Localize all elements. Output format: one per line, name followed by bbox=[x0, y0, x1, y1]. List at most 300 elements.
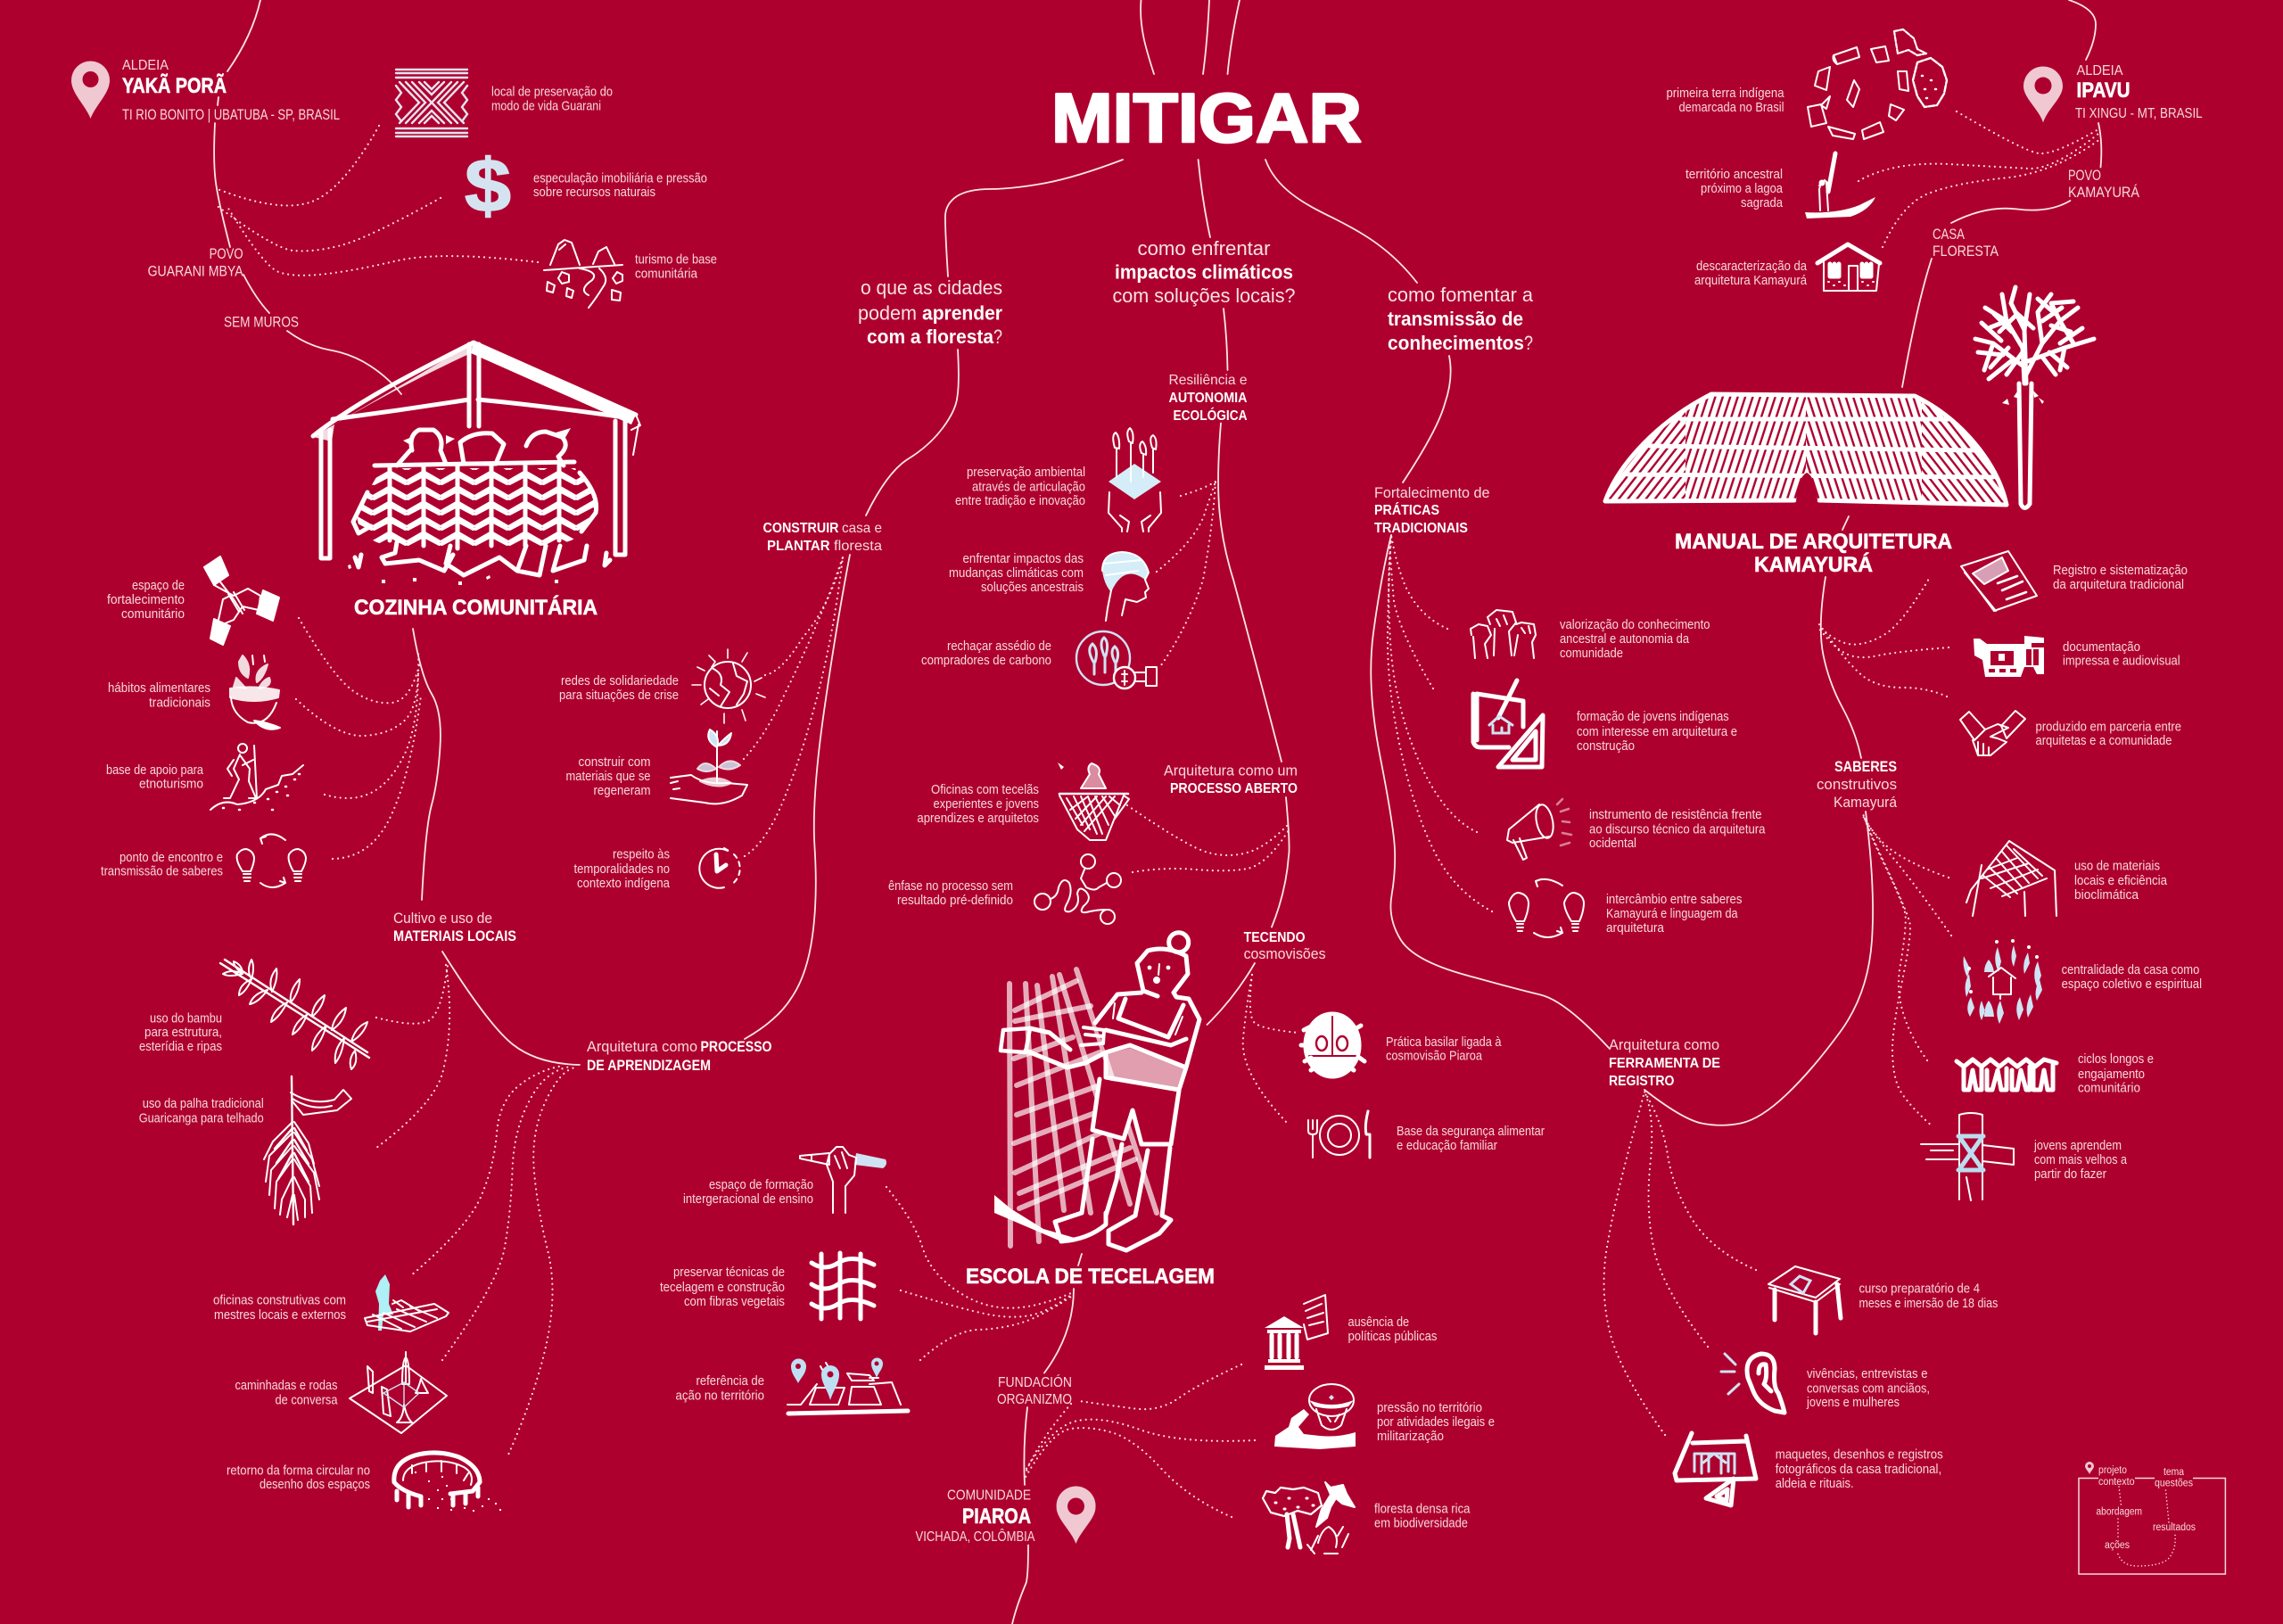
illustration: maloca bbox=[1605, 392, 2011, 508]
text bbox=[1589, 808, 1766, 851]
item: forma circular bbox=[227, 1453, 501, 1512]
location label: YAKÃ PORÃ bbox=[122, 73, 227, 98]
icon: figure in canoe bbox=[1805, 153, 1875, 218]
text: sagrada bbox=[1741, 196, 1784, 210]
text: com fibras vegetais bbox=[684, 1295, 785, 1309]
text: território ancestral bbox=[1685, 168, 1783, 182]
text: comunidade bbox=[1560, 647, 1623, 661]
heading: cosmovisões bbox=[1244, 945, 1326, 962]
label: povo bbox=[2068, 167, 2140, 201]
heading: PROCESSO ABERTO bbox=[1170, 781, 1298, 796]
icon: tree, bird and plant bbox=[1263, 1482, 1355, 1554]
heading: REGISTRO bbox=[1609, 1074, 1675, 1089]
text: Kamayurá e linguagem da bbox=[1606, 907, 1738, 921]
text: produzido em parceria entre bbox=[2035, 721, 2181, 735]
icon: ear bbox=[1721, 1354, 1784, 1413]
question: impactos climáticos bbox=[1113, 237, 1295, 307]
text bbox=[635, 253, 717, 282]
text bbox=[949, 552, 1084, 595]
icon: thatched frame bbox=[1966, 841, 2056, 916]
text bbox=[1377, 1401, 1495, 1444]
text: regeneram bbox=[594, 784, 651, 798]
legend labels: abordagem bbox=[2096, 1507, 2142, 1518]
legend frame bbox=[2079, 1479, 2225, 1574]
text bbox=[491, 86, 613, 114]
legend: map of the diagram bbox=[2079, 1462, 2225, 1574]
item: preservação ambiental bbox=[955, 428, 1161, 532]
text: entre tradição e inovação bbox=[955, 494, 1085, 508]
text: desenho dos espaços bbox=[260, 1478, 370, 1492]
text: meses e imersão de 18 dias bbox=[1859, 1297, 1998, 1311]
text: floresta densa rica bbox=[1374, 1502, 1471, 1516]
text bbox=[676, 1374, 764, 1404]
icon: trees on diamond with hands bbox=[1109, 428, 1161, 532]
location label: ALDEIA bbox=[2076, 63, 2123, 78]
text bbox=[1397, 1125, 1545, 1153]
heading: PLANTAR bbox=[767, 539, 830, 554]
item: vivências bbox=[1721, 1354, 1930, 1413]
item: intercâmbio entre saberes bbox=[1509, 879, 1743, 937]
icon: mask bbox=[1301, 1014, 1364, 1076]
icon: worker on platform bbox=[365, 1274, 449, 1331]
label: povo: KAMAYURÁ bbox=[2068, 184, 2140, 201]
text bbox=[108, 681, 210, 710]
text: Prática basilar ligada à bbox=[1386, 1035, 1502, 1050]
label: povo bbox=[148, 245, 243, 280]
text: etnoturismo bbox=[139, 778, 203, 792]
heading: MANUAL DE ARQUITETURA bbox=[1675, 530, 1952, 554]
text: fortalecimento bbox=[107, 593, 185, 607]
icon: joined hands bbox=[204, 556, 279, 645]
item: centralidade da casa bbox=[1964, 939, 2202, 1024]
text: ação no território bbox=[676, 1389, 764, 1404]
icon: saluting soldier bbox=[1274, 1384, 1356, 1449]
text bbox=[2063, 640, 2180, 669]
icon: food bowl bbox=[230, 655, 280, 730]
text: respeito às bbox=[613, 848, 670, 862]
text bbox=[1685, 168, 1784, 210]
text: Oficinas com tecelãs bbox=[931, 783, 1039, 797]
text: hábitos alimentares bbox=[108, 681, 210, 696]
text: experientes e jovens bbox=[933, 797, 1039, 812]
text: base de apoio para bbox=[106, 763, 204, 778]
panel: Cozinha Comunitária bbox=[101, 342, 640, 887]
text: maquetes, desenhos e registros bbox=[1776, 1448, 1943, 1463]
item: formação de jovens bbox=[1473, 680, 1737, 767]
text: descaracterização da bbox=[1696, 260, 1808, 274]
text: militarização bbox=[1377, 1430, 1444, 1444]
legend labels: resultados bbox=[2153, 1522, 2196, 1533]
text: jovens e mulheres bbox=[1806, 1396, 1900, 1410]
text: intergeracional de ensino bbox=[683, 1192, 813, 1207]
heading bbox=[763, 521, 882, 554]
text bbox=[559, 674, 679, 703]
icon: woman head profile bbox=[1102, 552, 1149, 621]
text: para estrutura, bbox=[144, 1026, 222, 1040]
text: vivências, entrevistas e bbox=[1807, 1367, 1928, 1381]
item: técnicas de tecelagem bbox=[660, 1253, 874, 1319]
text: comunitário bbox=[121, 607, 185, 622]
item: território ancestral bbox=[1685, 153, 1875, 218]
item: descaracterização bbox=[1694, 244, 1880, 291]
location label: TI RIO BONITO | UBATUBA - SP, BRASIL bbox=[122, 106, 340, 123]
heading: CONSTRUIR bbox=[763, 521, 839, 536]
text: transmissão de saberes bbox=[101, 865, 223, 879]
location label: COMUNIDADE bbox=[947, 1488, 1031, 1504]
text: preservação ambiental bbox=[967, 466, 1085, 480]
text: sobre recursos naturais bbox=[533, 185, 655, 200]
label: casa floresta: CASA bbox=[1933, 226, 1966, 243]
text: formação de jovens indígenas bbox=[1577, 710, 1729, 724]
item: valorização bbox=[1471, 610, 1710, 661]
icon: location pin bbox=[71, 61, 110, 119]
text: arquitetas e a comunidade bbox=[2035, 734, 2172, 748]
panel: Resiliência e autonomia ecológica bbox=[921, 373, 1248, 688]
item: hábitos alimentares bbox=[108, 655, 280, 730]
heading: ESCOLA DE TECELAGEM bbox=[966, 1265, 1215, 1289]
icon: ring of houses bbox=[1808, 29, 1947, 139]
question: transmissão de conhecimentos: como fomentar a bbox=[1388, 284, 1534, 306]
text bbox=[533, 171, 707, 200]
heading bbox=[1817, 758, 1897, 811]
text: construir com bbox=[578, 755, 651, 770]
text: preservar técnicas de bbox=[673, 1265, 785, 1280]
text bbox=[2062, 963, 2202, 992]
text: por atividades ilegais e bbox=[1377, 1415, 1495, 1430]
text bbox=[2078, 1052, 2154, 1095]
text bbox=[1374, 1502, 1471, 1530]
heading: PRÁTICAS bbox=[1374, 501, 1439, 518]
text bbox=[213, 1294, 346, 1323]
item: caminhadas bbox=[235, 1352, 447, 1433]
text: da arquitetura tradicional bbox=[2053, 578, 2184, 592]
panel: Comunidade Piaroa bbox=[915, 1295, 1495, 1554]
text: primeira terra indígena bbox=[1666, 87, 1784, 101]
text: ponto de encontro e bbox=[120, 851, 223, 865]
icon: globe bbox=[692, 649, 765, 723]
text bbox=[227, 1464, 370, 1492]
panel: Arquitetura como ferramenta de registro bbox=[1609, 1036, 1998, 1505]
text: cosmovisão Piaroa bbox=[1386, 1050, 1483, 1064]
item: etnoturismo bbox=[106, 744, 303, 810]
text: turismo de base bbox=[635, 253, 717, 268]
panel: Arquitetura como um processo aberto bbox=[888, 762, 1298, 924]
text: e educação familiar bbox=[1397, 1139, 1497, 1153]
icon: palm leaf bbox=[264, 1076, 351, 1224]
heading bbox=[1374, 484, 1489, 536]
text: ao discurso técnico da arquitetura bbox=[1589, 822, 1766, 837]
item: impactos das mudanças bbox=[949, 552, 1149, 621]
heading: Cultivo e uso de bbox=[393, 910, 492, 927]
text: ocidental bbox=[1589, 837, 1636, 851]
text: aprendizes e arquitetos bbox=[917, 812, 1039, 826]
text: ancestral e autonomia da bbox=[1560, 632, 1690, 647]
icon: trees in circle and buyer bbox=[1076, 631, 1157, 688]
illustration: tree bbox=[1975, 287, 2094, 508]
text bbox=[660, 1265, 785, 1309]
panel: Cultivo e uso de materiais locais bbox=[139, 910, 516, 1224]
text bbox=[106, 763, 204, 792]
panel: Saberes construtivos Kamayurá bbox=[1817, 758, 2202, 1200]
question: transmissão de conhecimentos: ? bbox=[1524, 332, 1533, 354]
icon: location pin bbox=[1057, 1487, 1096, 1544]
text: uso de materiais bbox=[2074, 860, 2160, 874]
text: com mais velhos a bbox=[2034, 1153, 2128, 1167]
text bbox=[139, 1097, 264, 1126]
legend labels bbox=[2096, 1465, 2196, 1551]
icon: winding path bbox=[1034, 854, 1121, 924]
text: impressa e audiovisual bbox=[2063, 655, 2180, 669]
text bbox=[139, 1011, 222, 1054]
item: preservação bbox=[396, 70, 613, 136]
text: retorno da forma circular no bbox=[227, 1464, 370, 1479]
text: partir do fazer bbox=[2034, 1167, 2106, 1182]
icon: woven pattern bbox=[396, 70, 467, 136]
heading bbox=[1168, 373, 1248, 424]
icon: dollar sign: $ bbox=[465, 144, 511, 227]
text: com interesse em arquitetura e bbox=[1577, 725, 1737, 739]
text bbox=[1666, 87, 1784, 115]
icon: mountains and houses bbox=[544, 240, 622, 308]
text: Registro e sistematização bbox=[2053, 564, 2188, 578]
label: Fundación Organizmo: ORGANIZMO bbox=[997, 1392, 1072, 1407]
item: temporalidades bbox=[574, 848, 740, 891]
panel: Aldeia Yakã Porã bbox=[71, 58, 717, 330]
text: materiais que se bbox=[565, 770, 651, 784]
icon: bamboo branch bbox=[220, 960, 369, 1069]
text: centralidade da casa como bbox=[2062, 963, 2199, 977]
legend labels: projeto bbox=[2098, 1465, 2127, 1476]
text bbox=[107, 579, 185, 622]
question: cidades e floresta: com a floresta bbox=[867, 326, 994, 348]
text: engajamento bbox=[2078, 1068, 2145, 1082]
text: fotográficos da casa tradicional, bbox=[1776, 1463, 1941, 1477]
legend labels: questões bbox=[2155, 1479, 2193, 1489]
item: turismo bbox=[544, 240, 717, 308]
heading: DE APRENDIZAGEM bbox=[587, 1057, 711, 1074]
text: espaço coletivo e espiritual bbox=[2062, 977, 2202, 992]
text: comunitária bbox=[635, 268, 698, 282]
location label bbox=[915, 1488, 1035, 1545]
icon: raised fists bbox=[1471, 610, 1536, 658]
question: impactos climáticos: com soluções locais? bbox=[1113, 284, 1295, 307]
text: rechaçar assédio de bbox=[947, 639, 1051, 654]
heading: floresta bbox=[834, 539, 882, 554]
item: redes de solidariedade bbox=[559, 649, 765, 723]
icon: model with camera triangle bbox=[1675, 1433, 1756, 1505]
legend pin bbox=[2085, 1462, 2094, 1474]
text: comunitário bbox=[2078, 1081, 2140, 1095]
heading: Arquitetura como bbox=[587, 1038, 697, 1055]
text: próximo a lagoa bbox=[1701, 182, 1784, 196]
icon: handshake bbox=[1960, 711, 2025, 755]
text bbox=[1859, 1282, 1998, 1311]
text: compradores de carbono bbox=[921, 654, 1051, 668]
heading: TECENDO bbox=[1244, 930, 1306, 945]
heading: construtivos bbox=[1817, 776, 1897, 793]
heading: TRADICIONAIS bbox=[1374, 521, 1468, 536]
label: Fundación Organizmo: FUNDACIÓN bbox=[998, 1373, 1072, 1390]
icon: map with pins bbox=[787, 1357, 908, 1414]
location label bbox=[122, 58, 340, 123]
illustration: weaver woman and loom bbox=[994, 933, 1199, 1250]
item: ênfase no processo bbox=[888, 854, 1121, 924]
question: impactos climáticos: como enfrentar bbox=[1138, 237, 1270, 260]
heading: Arquitetura como um bbox=[1164, 762, 1298, 779]
item: registro bbox=[1961, 551, 2188, 611]
heading bbox=[587, 1038, 772, 1074]
text: local de preservação do bbox=[491, 86, 613, 100]
question: transmissão de conhecimentos bbox=[1388, 284, 1534, 354]
item: oficinas construtivas bbox=[213, 1274, 449, 1331]
heading: KAMAYURÁ bbox=[1754, 552, 1873, 577]
item: referência de ação bbox=[676, 1357, 908, 1414]
text: caminhadas e rodas bbox=[235, 1379, 337, 1393]
item: floresta densa bbox=[1263, 1482, 1471, 1554]
text bbox=[2033, 1139, 2128, 1182]
location label: TI XINGU - MT, BRASIL bbox=[2075, 106, 2203, 121]
heading: Fortalecimento de bbox=[1374, 484, 1489, 501]
text: arquitetura bbox=[1606, 921, 1665, 936]
question: cidades e floresta: podem bbox=[858, 301, 917, 325]
item: assédio de carbono bbox=[921, 631, 1157, 688]
icon: arches bbox=[1957, 1059, 2056, 1090]
text: intercâmbio entre saberes bbox=[1606, 893, 1743, 907]
text bbox=[1776, 1448, 1943, 1491]
heading: ECOLÓGICA bbox=[1174, 407, 1248, 424]
text bbox=[888, 879, 1013, 908]
item: bambu bbox=[139, 960, 369, 1069]
text: Guaricanga para telhado bbox=[139, 1112, 264, 1126]
heading bbox=[393, 910, 516, 944]
heading: PROCESSO bbox=[701, 1038, 772, 1055]
text bbox=[1806, 1367, 1930, 1410]
text bbox=[1348, 1315, 1438, 1344]
text: esterídia e ripas bbox=[139, 1040, 222, 1054]
text: contexto indígena bbox=[577, 877, 671, 891]
icon: circular structure bbox=[394, 1453, 501, 1512]
legend labels: tema bbox=[2163, 1467, 2185, 1478]
text: uso da palha tradicional bbox=[143, 1097, 264, 1111]
label: casa floresta: FLORESTA bbox=[1933, 243, 1999, 260]
text: tecelagem e construção bbox=[660, 1281, 785, 1295]
text: para situações de crise bbox=[559, 688, 679, 703]
item: prática basilar bbox=[1301, 1014, 1502, 1076]
text bbox=[1577, 710, 1737, 754]
item: curso preparatório bbox=[1768, 1266, 1998, 1333]
panel: Escola de Tecelagem bbox=[660, 933, 1215, 1414]
location label: PIAROA bbox=[962, 1504, 1031, 1529]
question: impactos climáticos: impactos climáticos bbox=[1115, 260, 1293, 284]
heading bbox=[1164, 762, 1298, 796]
text: construção bbox=[1577, 739, 1635, 754]
item: palha bbox=[139, 1076, 351, 1224]
location label: VICHADA, COLÔMBIA bbox=[915, 1528, 1035, 1545]
text: ciclos longos e bbox=[2078, 1052, 2154, 1067]
text bbox=[683, 1178, 813, 1207]
item: primeira terra indígena bbox=[1666, 29, 1947, 139]
text bbox=[2035, 721, 2181, 748]
location label bbox=[2075, 63, 2203, 121]
icon: location pin bbox=[2023, 67, 2063, 123]
item: especulação bbox=[465, 144, 707, 227]
question: transmissão de conhecimentos: transmissão de bbox=[1388, 308, 1523, 330]
heading: MATERIAIS LOCAIS bbox=[393, 927, 516, 944]
text: bioclimática bbox=[2074, 888, 2139, 903]
text bbox=[917, 783, 1039, 826]
item: uso de materiais bbox=[1966, 841, 2168, 916]
item: parceria bbox=[1960, 711, 2181, 755]
item: transmissão de saberes bbox=[101, 834, 306, 887]
heading: Resiliência e bbox=[1168, 373, 1248, 388]
panel: Construir casa e plantar floresta bbox=[559, 521, 882, 891]
icon: video camera bbox=[1974, 636, 2044, 677]
item: instrumento de resistência bbox=[1507, 799, 1766, 860]
item: maquetes bbox=[1675, 1433, 1943, 1505]
panel: Tecendo cosmovisões bbox=[1244, 930, 1545, 1158]
item: materiais que se regeneram bbox=[565, 730, 747, 804]
question: cidades e floresta: ? bbox=[993, 326, 1002, 348]
label: Fundación Organizmo bbox=[997, 1373, 1072, 1407]
label: sem muros: SEM MUROS bbox=[224, 314, 299, 330]
text: jovens aprendem bbox=[2033, 1139, 2122, 1153]
icon: megaphone bbox=[1507, 799, 1571, 860]
legend labels: ações bbox=[2105, 1540, 2130, 1551]
panel: Manual de Arquitetura Kamayurá bbox=[1605, 287, 2188, 755]
text: locais e eficiência bbox=[2074, 874, 2168, 888]
item: ciclos longos bbox=[1957, 1052, 2154, 1095]
item: documentação bbox=[1974, 636, 2180, 677]
legend dotted path bbox=[2118, 1487, 2175, 1566]
panel: Fortalecimento de práticas tradicionais bbox=[1374, 484, 1766, 937]
heading bbox=[1609, 1036, 1720, 1089]
heading: Kamayurá bbox=[1834, 794, 1897, 811]
text bbox=[921, 639, 1051, 668]
text: em biodiversidade bbox=[1374, 1516, 1468, 1530]
question: transmissão de conhecimentos: conhecimentos bbox=[1388, 332, 1524, 354]
text: espaço de formação bbox=[709, 1178, 813, 1192]
icon: book bbox=[1961, 551, 2037, 611]
text: soluções ancestrais bbox=[981, 581, 1084, 595]
heading: COZINHA COMUNITÁRIA bbox=[354, 595, 598, 620]
icon: table with plans bbox=[1768, 1266, 1841, 1333]
panel: Arquitetura como processo de aprendizagem bbox=[213, 1038, 772, 1512]
text: redes de solidariedade bbox=[561, 674, 679, 688]
text: modo de vida Guarani bbox=[491, 100, 601, 114]
text bbox=[1694, 260, 1808, 288]
label: povo: POVO bbox=[2068, 167, 2101, 184]
heading: AUTONOMIA bbox=[1168, 391, 1248, 406]
item: oficinas com tecelãs bbox=[917, 763, 1129, 840]
icon: people around house bbox=[1964, 939, 2042, 1024]
text: instrumento de resistência frente bbox=[1589, 808, 1762, 822]
item: fortalecimento bbox=[107, 556, 279, 645]
text: especulação imobiliária e pressão bbox=[533, 171, 707, 185]
heading: casa e bbox=[842, 521, 882, 536]
text: arquitetura Kamayurá bbox=[1694, 274, 1808, 288]
text bbox=[574, 848, 671, 891]
text bbox=[235, 1379, 338, 1408]
heading bbox=[1244, 930, 1326, 962]
text: referência de bbox=[696, 1374, 764, 1389]
text: tradicionais bbox=[149, 696, 210, 710]
icon: light bulbs exchange bbox=[237, 834, 306, 887]
icon: clock bbox=[699, 848, 740, 888]
text: documentação bbox=[2063, 640, 2140, 655]
text bbox=[101, 851, 223, 879]
icon: blueprint and set square bbox=[1473, 680, 1543, 767]
item: jovens aprendem bbox=[1921, 1113, 2128, 1200]
